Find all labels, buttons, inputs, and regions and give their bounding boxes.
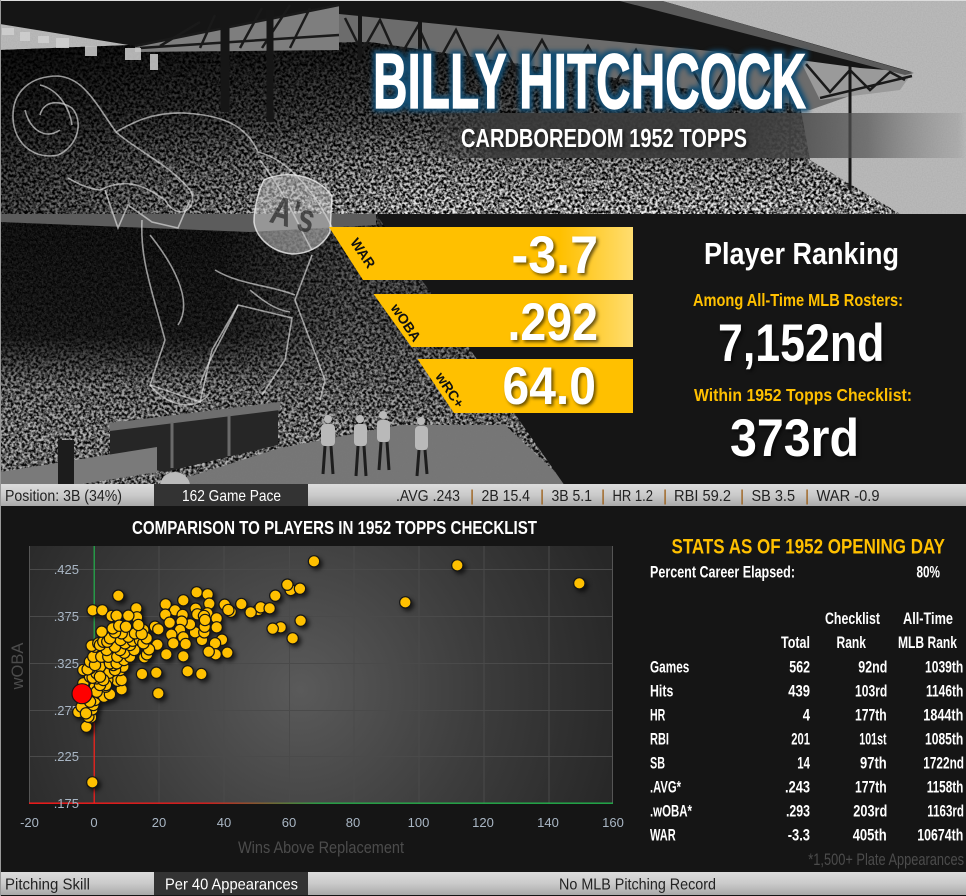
career elapsed bbox=[650, 564, 940, 582]
stat chevron: wOBA: .292 bbox=[508, 293, 598, 352]
row: hits: 103rd bbox=[855, 683, 887, 701]
row: rbi bbox=[650, 731, 963, 749]
value: all-time rank: 7,152nd bbox=[718, 314, 884, 373]
row: stolen bases bbox=[650, 755, 964, 773]
status bar: 162 game pace: | bbox=[540, 488, 544, 505]
x axis labels: 100 bbox=[408, 815, 429, 830]
status bar: 162 game pace: 3B 5.1 bbox=[552, 488, 592, 505]
row: woba: 203rd bbox=[853, 803, 887, 821]
y axis labels bbox=[54, 562, 79, 811]
x axis labels: 140 bbox=[537, 815, 559, 830]
stat chevron: wRC+: wRC+ bbox=[432, 368, 468, 411]
stats table bbox=[650, 536, 964, 869]
heading: player ranking: Player Ranking bbox=[704, 236, 899, 271]
career elapsed: 80% bbox=[916, 564, 940, 582]
x axis labels bbox=[20, 815, 624, 830]
row: war: -3.3 bbox=[788, 827, 810, 845]
column headers: Checklist bbox=[825, 610, 880, 628]
column headers: Total bbox=[781, 634, 810, 652]
row: home runs: HR bbox=[650, 707, 665, 725]
status bar: 162 game pace: | bbox=[470, 488, 474, 505]
row: woba bbox=[650, 803, 964, 821]
row: home runs: 4 bbox=[803, 707, 811, 725]
dark stats panel bbox=[376, 214, 966, 486]
career elapsed: Percent Career Elapsed: bbox=[650, 564, 795, 582]
status bar: 162 game pace: | bbox=[601, 488, 605, 505]
status bar: 162 game pace: | bbox=[805, 488, 809, 505]
row: hits: Hits bbox=[650, 683, 673, 701]
row: rbi: 201 bbox=[791, 731, 810, 749]
y axis labels: .425 bbox=[54, 562, 79, 577]
highlighted player point bbox=[72, 684, 92, 704]
stadium photograph bbox=[0, 0, 966, 500]
stat chevron: WAR bbox=[329, 226, 633, 285]
column headers: Rank bbox=[836, 634, 867, 652]
row: war: WAR bbox=[650, 827, 676, 845]
status bar: 162 game pace: .AVG .243 bbox=[396, 488, 460, 505]
x axis line bbox=[29, 802, 613, 804]
stat chevron: wOBA: wOBA bbox=[387, 300, 424, 344]
stat chevron: wOBA bbox=[374, 293, 633, 352]
y axis title: wOBA bbox=[9, 643, 27, 690]
row: batting average: .AVG* bbox=[650, 779, 681, 797]
player points bbox=[73, 556, 585, 788]
x axis title: Wins Above Replacement bbox=[238, 839, 404, 857]
scatter chart bbox=[9, 546, 624, 857]
value: checklist rank: 373rd bbox=[730, 409, 859, 468]
stat chevron: WAR: -3.7 bbox=[512, 226, 598, 285]
Athletics elephant logo overlay bbox=[13, 76, 334, 405]
row: hits: 439 bbox=[788, 683, 810, 701]
row: games: 562 bbox=[789, 659, 810, 677]
status bar: 162 game pace: SB 3.5 bbox=[752, 488, 795, 505]
status bar: 162 game pace: 162 Game Pace bbox=[182, 488, 281, 505]
row: batting average: .243 bbox=[785, 779, 810, 797]
chart title: COMPARISON TO PLAYERS IN 1952 TOPPS CHECKLIST bbox=[132, 517, 538, 538]
column headers: All-Time bbox=[903, 610, 953, 628]
row: games: Games bbox=[650, 659, 689, 677]
y axis labels: .225 bbox=[54, 749, 79, 764]
x axis labels: 20 bbox=[152, 815, 166, 830]
status bar: 162 game pace: | bbox=[663, 488, 667, 505]
label: all-time rosters: Among All-Time MLB Rosters: bbox=[693, 290, 903, 310]
x axis labels: 160 bbox=[602, 815, 624, 830]
subtitle banner: CARDBOREDOM 1952 TOPPS bbox=[461, 123, 747, 153]
row: woba: .wOBA* bbox=[650, 803, 692, 821]
x axis labels: 80 bbox=[346, 815, 360, 830]
row: woba: .293 bbox=[786, 803, 810, 821]
A's shield logo: A's bbox=[266, 188, 320, 242]
status bar: 162 game pace: HR 1.2 bbox=[612, 488, 653, 505]
column headers bbox=[781, 610, 958, 652]
row: hits bbox=[650, 683, 963, 701]
x axis labels: 40 bbox=[217, 815, 231, 830]
row: batting average: 177th bbox=[855, 779, 887, 797]
x axis labels: 0 bbox=[90, 815, 98, 830]
x axis labels: -20 bbox=[20, 815, 39, 830]
plot background bbox=[29, 546, 613, 803]
status bar: 162 game pace: | bbox=[740, 488, 744, 505]
status bar: pitching bbox=[0, 872, 966, 895]
lower photo area bbox=[1, 214, 564, 484]
y axis labels: .275 bbox=[54, 703, 79, 718]
status bar: 162 game pace: Position: 3B (34%) bbox=[5, 488, 122, 505]
status bar: 162 game pace: RBI 59.2 bbox=[674, 488, 731, 505]
row: war: 405th bbox=[853, 827, 887, 845]
row: games bbox=[650, 659, 963, 677]
y axis labels: .175 bbox=[54, 796, 79, 811]
label: checklist rank: Within 1952 Topps Checklist: bbox=[694, 385, 912, 405]
status bar: 162 game pace: 2B 15.4 bbox=[482, 488, 530, 505]
row: games: 92nd bbox=[858, 659, 887, 677]
subtitle banner bbox=[420, 113, 966, 158]
row: home runs bbox=[650, 707, 963, 725]
status bar: pitching: No MLB Pitching Record bbox=[559, 876, 716, 894]
row: rbi: 101st bbox=[859, 731, 887, 749]
x axis labels: 120 bbox=[472, 815, 494, 830]
status bar: 162 game pace bbox=[0, 484, 966, 506]
row: war bbox=[650, 827, 963, 845]
row: stolen bases: 97th bbox=[860, 755, 887, 773]
stat chevron: wRC+: 64.0 bbox=[502, 357, 596, 416]
y axis labels: .375 bbox=[54, 609, 79, 624]
row: batting average bbox=[650, 779, 963, 797]
A's shield logo bbox=[254, 175, 332, 254]
row: rbi: RBI bbox=[650, 731, 669, 749]
y axis labels: .325 bbox=[54, 656, 79, 671]
status bar: pitching: Pitching Skill bbox=[5, 876, 90, 894]
stat chevron: WAR: WAR bbox=[347, 235, 379, 271]
status bar: pitching: Per 40 Appearances bbox=[165, 876, 298, 894]
y axis line bbox=[94, 546, 95, 803]
stat chevron: wRC+ bbox=[418, 357, 633, 416]
x axis labels: 60 bbox=[282, 815, 296, 830]
row: stolen bases: SB bbox=[650, 755, 665, 773]
row: home runs: 177th bbox=[855, 707, 887, 725]
row: stolen bases: 14 bbox=[797, 755, 811, 773]
status bar: 162 game pace: WAR -0.9 bbox=[816, 488, 880, 505]
player ranking panel bbox=[693, 236, 912, 468]
